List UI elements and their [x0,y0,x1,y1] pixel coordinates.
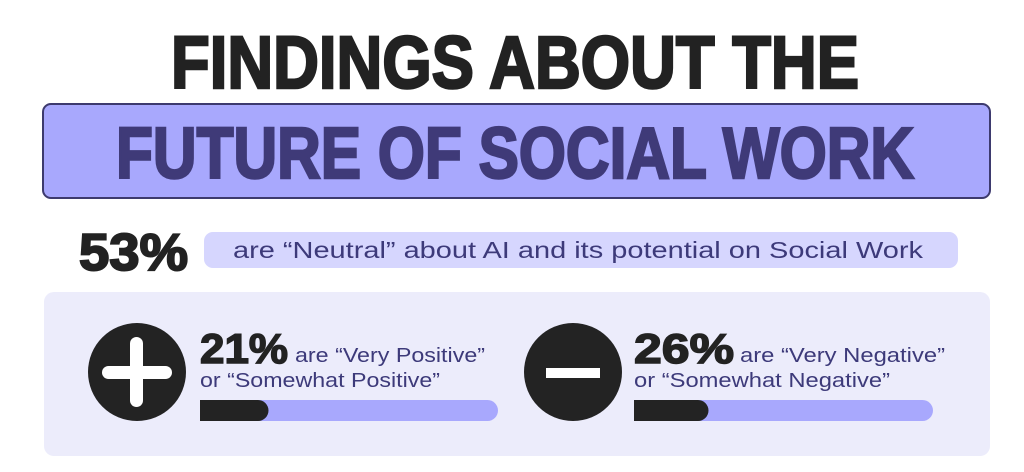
negative stat text: 26% [634,325,734,372]
negative stat text: or “Somewhat Negative” [634,370,890,392]
stat: neutral: are “Neutral” about AI and its potential on Social Work [233,237,924,263]
positive stat text: 21% [200,325,288,372]
icon: minus [524,323,622,421]
stat: neutral [79,224,958,282]
negative bar [634,400,933,421]
icon: plus [88,323,186,421]
negative stat text: are “Very Negative” [740,345,945,367]
positive bar [200,400,498,421]
panel: sentiment [44,292,990,456]
positive stat text: are “Very Positive” [295,345,485,367]
title: FINDINGS ABOUT THE [171,21,859,104]
negative stat text [634,325,945,392]
positive stat text: or “Somewhat Positive” [200,370,440,392]
positive stat text [200,325,485,392]
stat: neutral: 53% [79,224,188,282]
